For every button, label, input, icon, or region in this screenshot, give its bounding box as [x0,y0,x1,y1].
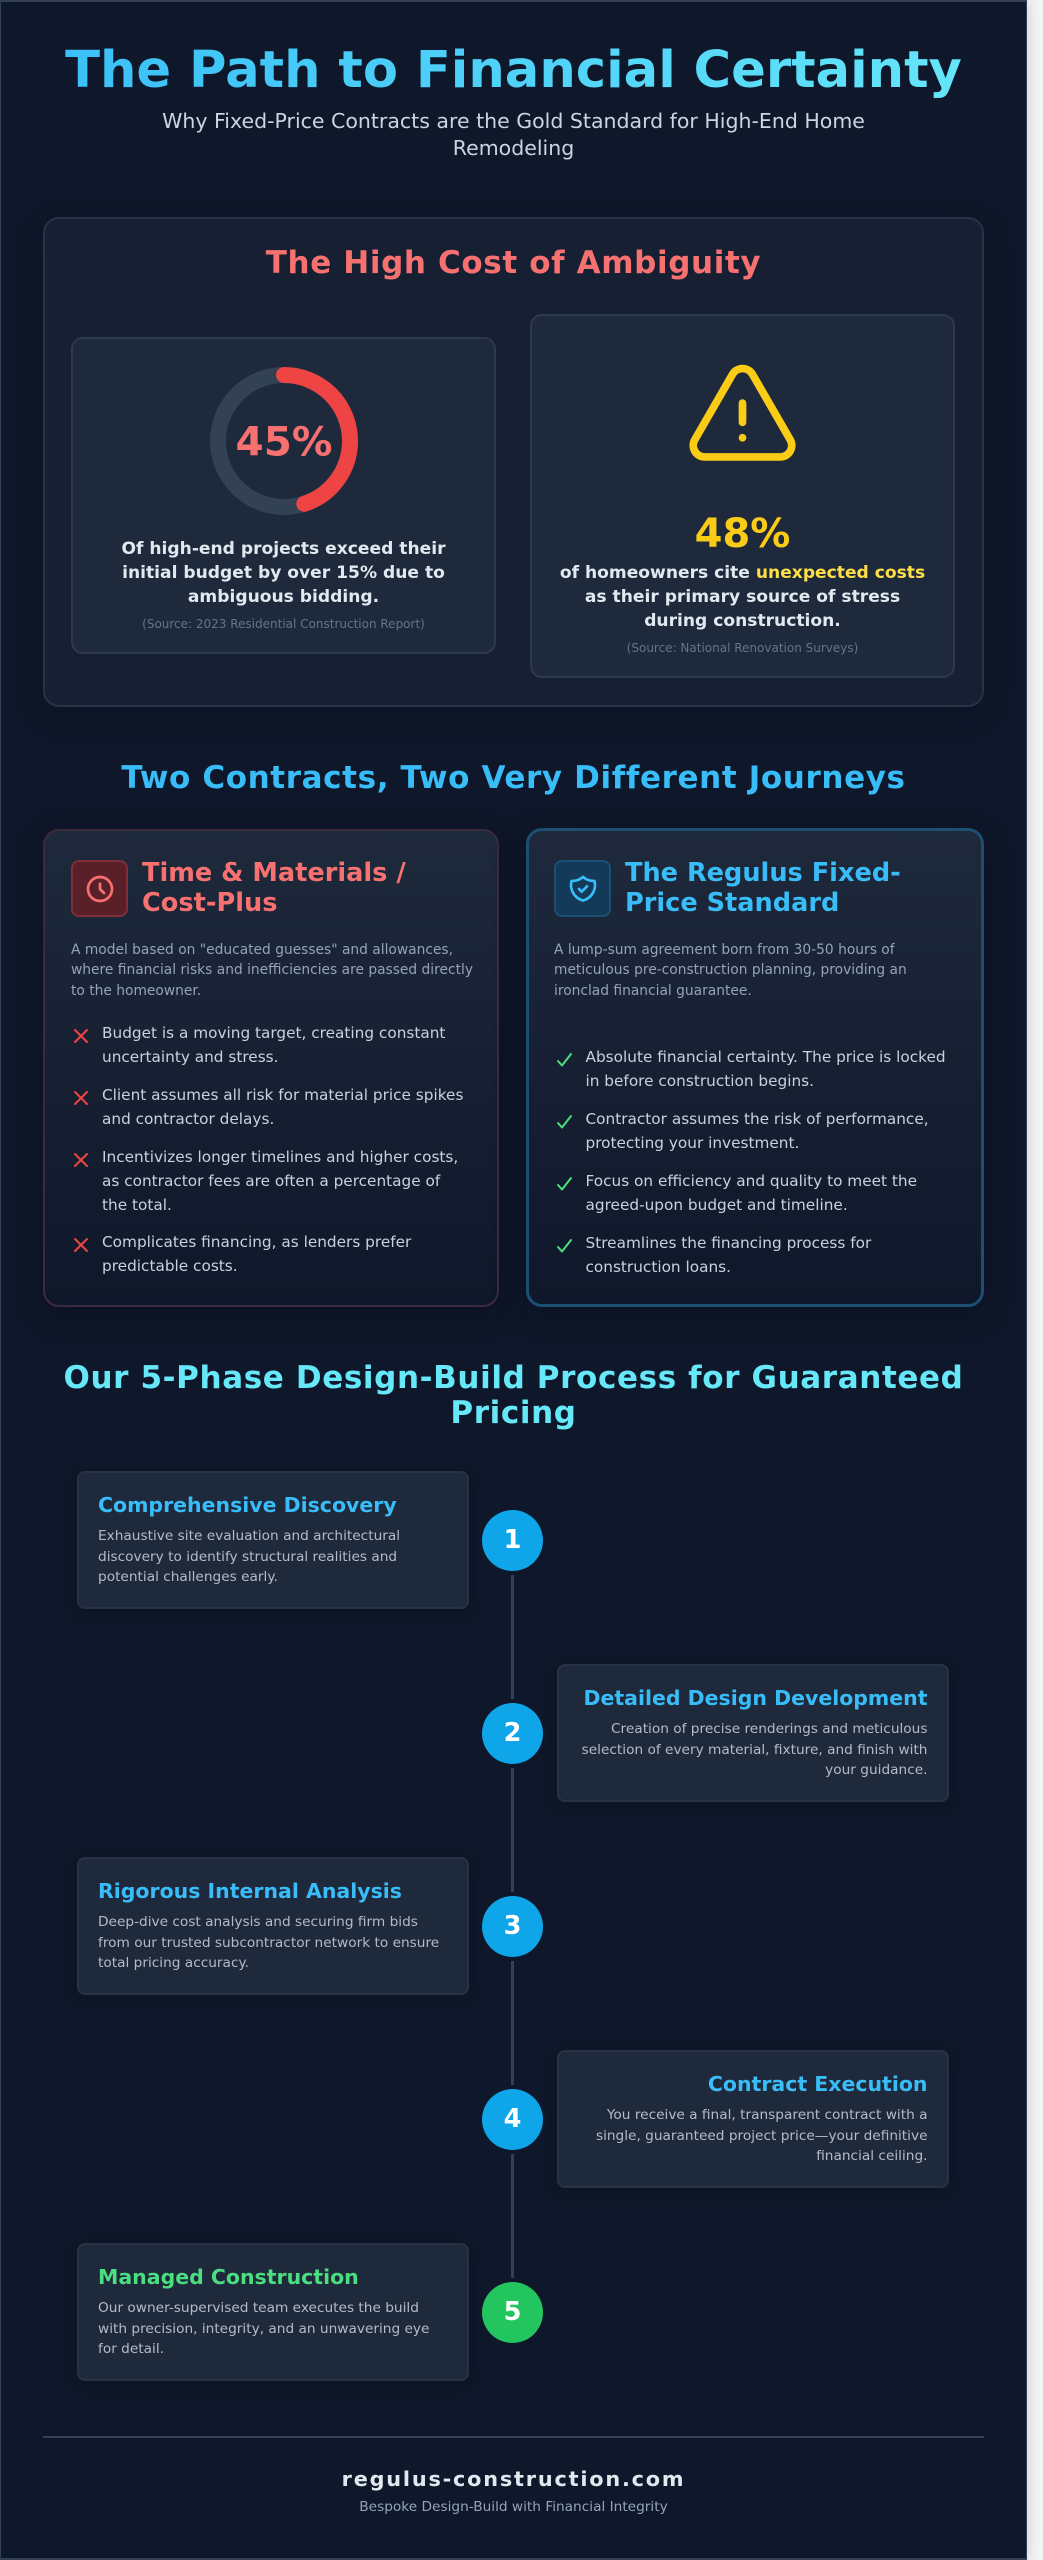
list item: construction loans. [586,1258,731,1276]
step 3 number [482,1896,543,1956]
list item: Budget is a moving target, creating constant [102,1024,445,1042]
card heading [625,858,901,918]
list item: Absolute financial certainty. The price is locked [586,1048,946,1066]
heading: 5-phase process: Pricing [450,1394,577,1430]
step description: financial ceiling. [816,2148,928,2164]
card heading [142,858,406,918]
source note: (Source: 2023 Residential Construction Report) [142,617,425,631]
step 1 card [77,1471,469,1609]
list item: the total. [102,1196,172,1214]
step description: Exhaustive site evaluation and architectural [98,1528,400,1544]
step description: from our trusted subcontractor network to ensure [98,1934,439,1950]
step description: with precision, integrity, and an unwavering eye [98,2320,429,2336]
step 1 number: 1 [504,1524,521,1554]
list item: and contractor delays. [102,1110,274,1128]
step 2 number: 2 [504,1718,521,1748]
card description: to the homeowner. [71,982,201,998]
donut chart: 45%: 45% [236,418,332,466]
step title: Managed Construction [98,2265,359,2289]
list item: Streamlines the financing process for [586,1234,871,1252]
step 2 number [482,1702,543,1764]
subtitle: Why Fixed-Price Contracts are the Gold Standard for High-End Home [162,108,865,132]
footer [342,2467,685,2515]
source note: (Source: National Renovation Surveys) [627,641,858,655]
card description: A model based on "educated guesses" and allowances, [71,942,453,958]
stat description [121,539,446,607]
step title: Contract Execution [708,2072,928,2096]
step description [582,1721,928,1778]
step description [98,1528,400,1585]
card heading: Price Standard [625,888,839,918]
step description: discovery to identify structural realities and [98,1548,397,1564]
step description: single, guaranteed project price—your definitive [596,2128,928,2144]
step title: Detailed Design Development [584,1686,928,1710]
step description [596,2107,928,2164]
icon: clock [71,860,128,917]
list item: in before construction begins. [586,1072,814,1090]
timeline connector [511,1540,514,2312]
subtitle: Remodeling [453,136,574,160]
title: The Path to Financial Certainty [65,40,962,100]
list item: Contractor assumes the risk of performance, [586,1110,929,1128]
step 5 number [482,2282,543,2342]
list item: agreed-upon budget and timeline. [586,1196,848,1214]
step title: Comprehensive Discovery [98,1493,397,1517]
card description: ironclad financial guarantee. [554,982,752,998]
list item: as contractor fees are often a percentage of [102,1172,440,1190]
panel: high cost of ambiguity [43,217,984,707]
step description: your guidance. [825,1762,928,1778]
list item [74,1024,445,1066]
step description [98,1914,439,1971]
stat description: initial budget by over 15% due to [122,563,445,583]
step description: selection of every material, fixture, and finish with [582,1742,928,1758]
list item: predictable costs. [102,1257,238,1275]
stat description: Of high-end projects exceed their [121,539,446,559]
step 4 number [482,2088,543,2150]
card description: meticulous pre-construction planning, providing an [554,962,907,978]
list: benefits [557,1048,946,1276]
list item [557,1234,872,1276]
list item: uncertainty and stress. [102,1048,279,1066]
step description: Our owner-supervised team executes the build [98,2300,419,2316]
stat description: during construction. [644,611,841,631]
step title: Rigorous Internal Analysis [98,1879,402,1903]
website: regulus-construction.com [342,2467,685,2491]
step 4 number: 4 [504,2104,521,2134]
card description: where financial risks and inefficiencies are passed directly [71,962,473,978]
step description: You receive a final, transparent contract with a [607,2107,928,2123]
step 4 card [557,2050,949,2188]
heading: two contracts: Two Contracts, Two Very Different Journeys [121,760,906,796]
list item [557,1048,946,1090]
card heading: Time & Materials / [142,858,406,888]
heading: the high cost of ambiguity: The High Cost of Ambiguity [266,245,761,281]
step 1 number [482,1510,543,1570]
panel: time and materials [43,829,499,1307]
list item [74,1233,412,1275]
stat description: as their primary source of stress [585,587,900,607]
stat description [560,563,925,631]
step 5 number: 5 [504,2296,521,2326]
step 2 card [557,1664,949,1802]
list: drawbacks [74,1024,463,1275]
card description [554,942,907,998]
list item [74,1148,458,1214]
step description: Creation of precise renderings and meticulous [611,1721,928,1737]
step 3 number: 3 [504,1910,521,1940]
tagline: Bespoke Design-Build with Financial Integrity [359,2499,668,2515]
stat card: 45 percent [71,337,496,654]
card description: A lump-sum agreement born from 30-50 hours of [554,942,895,958]
stat description: ambiguous bidding. [188,587,379,607]
step 5 card [77,2243,469,2381]
step 3 card [77,1857,469,1995]
step description: potential challenges early. [98,1569,278,1585]
stat value: 48% [695,511,790,557]
icon: warning triangle [689,364,796,461]
list item: Incentivizes longer timelines and higher costs, [102,1148,458,1166]
panel: fixed-price standard [526,828,984,1307]
icon: shield check [554,860,611,917]
list item: protecting your investment. [586,1134,799,1152]
subtitle [162,108,865,160]
card description [71,942,473,998]
list item: Client assumes all risk for material price spikes [102,1086,463,1104]
donut chart: 45% [210,367,358,515]
step description: total pricing accuracy. [98,1955,249,1971]
list item: Complicates financing, as lenders prefer [102,1233,411,1251]
list item [557,1110,929,1152]
card heading: The Regulus Fixed- [625,858,901,888]
list item [557,1172,917,1214]
stat description: of homeowners cite unexpected costs [560,563,925,583]
step description: Deep-dive cost analysis and securing firm bids [98,1914,418,1930]
stat card: 48 percent [530,314,955,678]
list item [74,1086,463,1128]
card heading: Cost-Plus [142,888,277,918]
heading: 5-phase process [64,1360,964,1430]
step description: for detail. [98,2341,164,2357]
heading: 5-phase process: Our 5-Phase Design-Build Process for Guaranteed [64,1360,964,1396]
list item: Focus on efficiency and quality to meet the [586,1172,917,1190]
step description [98,2300,429,2357]
